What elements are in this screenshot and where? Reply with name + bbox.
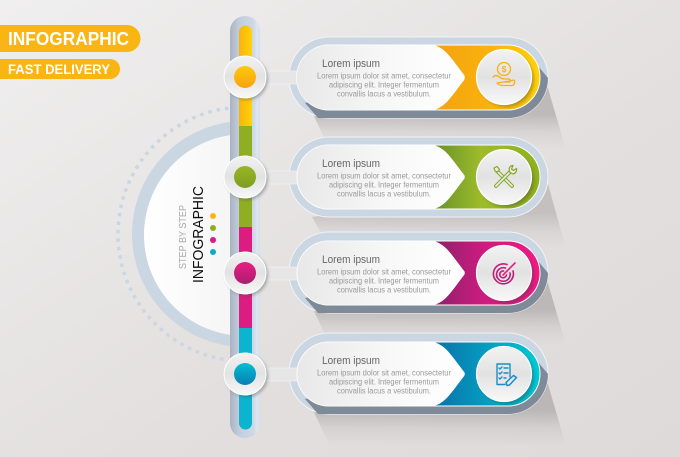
icon: coin in hand <box>493 62 515 86</box>
body text: Lorem ipsum dolor sit amet, consectetur <box>317 172 451 180</box>
body text: Lorem ipsum dolor sit amet, consectetur <box>317 368 451 378</box>
node 2 <box>224 156 268 200</box>
node 3 <box>224 252 268 296</box>
connector <box>262 267 300 280</box>
body text: convallis lacus a vestibulum. <box>337 90 431 98</box>
node 1 <box>224 56 268 100</box>
vertical track <box>230 16 260 438</box>
body text: adipiscing elit. Integer fermentum <box>329 276 439 286</box>
body text: convallis lacus a vestibulum. <box>337 386 431 396</box>
banner: FAST DELIVERY <box>0 59 120 79</box>
connector <box>262 71 300 84</box>
body text <box>317 72 451 98</box>
banner: FAST DELIVERY: FAST DELIVERY <box>8 62 110 77</box>
body text: adipiscing elit. Integer fermentum <box>329 180 439 190</box>
icon: coin in hand: $ <box>502 64 507 74</box>
body text <box>317 368 451 396</box>
connector <box>262 368 300 381</box>
title: Lorem ipsum <box>322 254 380 266</box>
icon circle <box>480 53 534 107</box>
body text: convallis lacus a vestibulum. <box>337 190 431 198</box>
body text: convallis lacus a vestibulum. <box>337 286 431 294</box>
body text <box>317 172 451 198</box>
title: Lorem ipsum <box>322 355 380 367</box>
icon: checklist <box>497 364 516 386</box>
icon circle <box>480 350 534 404</box>
icon circle <box>480 249 534 303</box>
card 1: yellow <box>262 37 566 150</box>
text: step by step: STEP BY STEP <box>177 205 189 269</box>
title: Lorem ipsum <box>322 58 380 70</box>
body text: Lorem ipsum dolor sit amet, consectetur <box>317 268 451 276</box>
legend dots <box>210 213 216 255</box>
semicircle panel: step by step <box>116 106 230 361</box>
title: Lorem ipsum <box>322 158 380 170</box>
text: infographic vertical: INFOGRAPHIC <box>190 186 207 283</box>
card 4: blue <box>262 333 566 446</box>
banner: INFOGRAPHIC: INFOGRAPHIC <box>8 28 129 49</box>
node 4 <box>224 353 268 397</box>
icon: tools <box>494 166 517 186</box>
body text: adipiscing elit. Integer fermentum <box>329 80 439 90</box>
body text <box>317 268 451 294</box>
icon circle <box>480 153 534 207</box>
card 3: magenta <box>262 232 566 345</box>
body text: adipiscing elit. Integer fermentum <box>329 378 439 386</box>
card 2: green <box>262 137 566 249</box>
body text: Lorem ipsum dolor sit amet, consectetur <box>317 72 451 80</box>
connector <box>262 171 300 184</box>
icon: target <box>493 263 515 284</box>
